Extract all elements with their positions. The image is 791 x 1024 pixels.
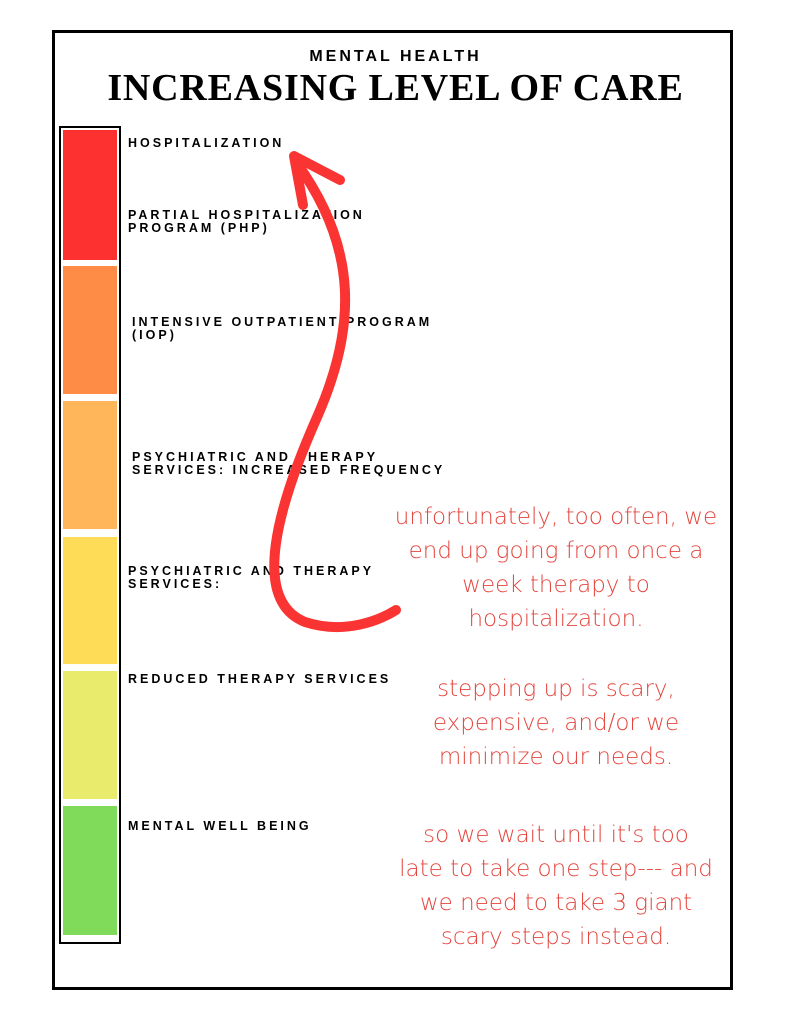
- note 1: end up going from once a: [409, 538, 703, 564]
- note 2: minimize our needs.: [439, 744, 673, 770]
- title small: MENTAL HEALTH: [309, 48, 482, 65]
- text: PARTIAL HOSPITALIZATION: [128, 208, 365, 222]
- note 3: [399, 822, 713, 950]
- text: SERVICES: INCREASED FREQUENCY: [132, 463, 445, 477]
- labels: [128, 136, 445, 833]
- text: PROGRAM (PHP): [128, 221, 270, 235]
- title main: INCREASING LEVEL OF CARE: [107, 67, 684, 109]
- text: (IOP): [132, 328, 177, 342]
- level bar: [59, 126, 121, 944]
- text: PSYCHIATRIC AND THERAPY: [132, 450, 378, 464]
- text: MENTAL WELL BEING: [128, 819, 312, 833]
- note 1: unfortunately, too often, we: [395, 504, 717, 530]
- note 3: we need to take 3 giant: [420, 890, 692, 916]
- note 3: so we wait until it's too: [423, 822, 689, 848]
- text: HOSPITALIZATION: [128, 136, 284, 150]
- text: PSYCHIATRIC AND THERAPY: [128, 564, 374, 578]
- note 2: expensive, and/or we: [433, 710, 679, 736]
- note 3: scary steps instead.: [441, 924, 671, 950]
- note 2: [433, 676, 679, 770]
- note 1: week therapy to: [462, 572, 650, 598]
- note 3: late to take one step--- and: [399, 856, 713, 882]
- note 1: hospitalization.: [468, 606, 644, 632]
- text: INTENSIVE OUTPATIENT PROGRAM: [132, 315, 432, 329]
- text: SERVICES:: [128, 577, 222, 591]
- note 2: stepping up is scary,: [437, 676, 675, 702]
- text: REDUCED THERAPY SERVICES: [128, 672, 391, 686]
- note 1: [395, 504, 717, 632]
